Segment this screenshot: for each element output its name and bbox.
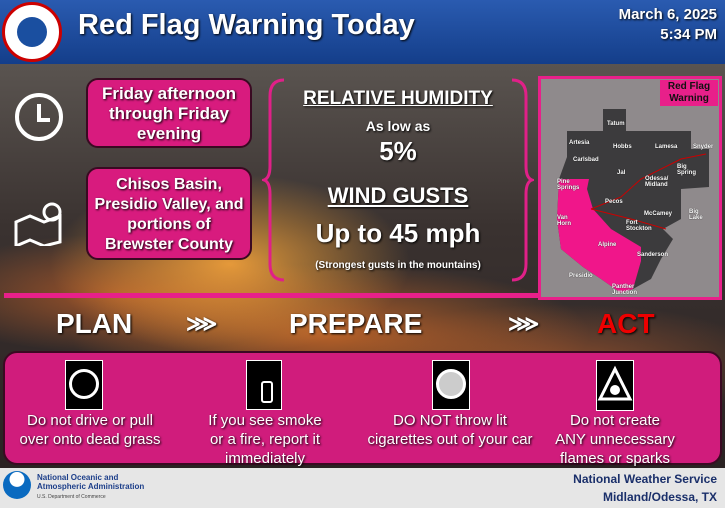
NWS office: Midland/Odessa, TX (603, 490, 717, 504)
center stats block: (Strongest gusts in the mountains) (315, 260, 481, 271)
bottom action panel: immediately (225, 450, 305, 467)
bottom action panel (3, 351, 722, 465)
humidity: RELATIVE HUMIDITY (303, 88, 493, 109)
date and time (619, 6, 719, 43)
map panel: Junction (612, 290, 637, 296)
divider line (4, 293, 538, 298)
map panel: Hobbs (613, 144, 632, 150)
map panel: Big (689, 209, 699, 215)
location box: Presidio Valley, and (94, 196, 244, 213)
location box: portions of (127, 216, 211, 233)
map panel: Spring (677, 170, 696, 176)
map panel: Alpine (598, 242, 616, 248)
bottom action panel: Do not drive or pull (27, 412, 153, 429)
NOAA text: Atmospheric Administration (37, 482, 144, 491)
map panel: Artesia (569, 140, 589, 146)
icon: clock (15, 93, 63, 141)
bottom action panel: Do not create (570, 412, 660, 429)
icon: map pin (14, 202, 62, 246)
action: report fire (246, 360, 282, 410)
center stats block: As low as (366, 118, 430, 134)
wind gusts: WIND GUSTS (328, 183, 468, 208)
steps row: ⋙ (186, 311, 217, 336)
map label: Red Flag Warning (668, 81, 710, 104)
map panel (538, 76, 722, 300)
action: no driving (65, 360, 103, 410)
map panel: Horn (557, 221, 571, 227)
map panel: Springs (557, 185, 579, 191)
bottom action panel: or a fire, report it (210, 431, 320, 448)
map panel: Stockton (626, 226, 652, 232)
location box (86, 167, 252, 260)
NOAA text: National Oceanic and (37, 473, 118, 482)
steps row (56, 308, 656, 339)
steps row: ACT (597, 308, 655, 339)
map panel: Pecos (605, 199, 623, 205)
bottom action panel: DO NOT throw lit (393, 412, 507, 429)
bottom action panel: If you see smoke (208, 412, 322, 429)
time box (86, 78, 252, 148)
map panel: Panther (612, 284, 634, 290)
bottom action panel: ANY unnecessary (555, 431, 675, 448)
map panel: Midland (645, 182, 668, 188)
bottom action panel: over onto dead grass (20, 431, 160, 448)
center stats block: Up to 45 mph (316, 218, 480, 248)
location box: Brewster County (105, 236, 233, 253)
action: cigarettes (432, 360, 470, 410)
map panel: Pine (557, 179, 570, 185)
map panel: Odessa/ (645, 176, 668, 182)
map panel: Big (677, 164, 687, 170)
map panel: Snyder (693, 144, 713, 150)
map panel: Jal (617, 170, 625, 176)
date and time: 5:34 PM (660, 26, 717, 43)
icon: NWS logo (2, 2, 62, 62)
map panel: Carlsbad (573, 157, 599, 163)
NWS office: National Weather Service (573, 472, 717, 486)
header bar (0, 0, 725, 64)
bottom action panel: cigarettes out of your car (367, 431, 533, 448)
map panel: Sanderson (637, 252, 668, 258)
location box: Chisos Basin, (116, 176, 222, 193)
footer (0, 468, 725, 508)
NOAA text (37, 473, 144, 500)
map label (660, 80, 718, 106)
map panel: Van (557, 215, 568, 221)
time box: evening (137, 124, 201, 143)
steps row: ⋙ (508, 311, 539, 336)
map panel: Fort (626, 220, 638, 226)
bottom action panel: flames or sparks (560, 450, 670, 467)
map panel: Tatum (607, 121, 625, 127)
map panel: Lake (689, 215, 703, 221)
steps row: PLAN (56, 308, 132, 339)
map panel: Lamesa (655, 144, 677, 150)
center stats block: 5% (379, 136, 417, 166)
NWS office (573, 472, 717, 504)
map panel: Presidio (569, 273, 593, 279)
background (0, 64, 725, 470)
NOAA text: U.S. Department of Commerce (37, 494, 106, 500)
center stats block (262, 78, 534, 282)
time box: Friday afternoon (102, 84, 236, 103)
map panel: McCamey (644, 211, 672, 217)
date and time: March 6, 2025 (619, 6, 717, 23)
time box: through Friday (109, 104, 229, 123)
action: no flames (596, 360, 634, 411)
steps row: PREPARE (289, 308, 422, 339)
icon: NOAA logo (3, 471, 31, 499)
title: Red Flag Warning Today (78, 9, 415, 41)
